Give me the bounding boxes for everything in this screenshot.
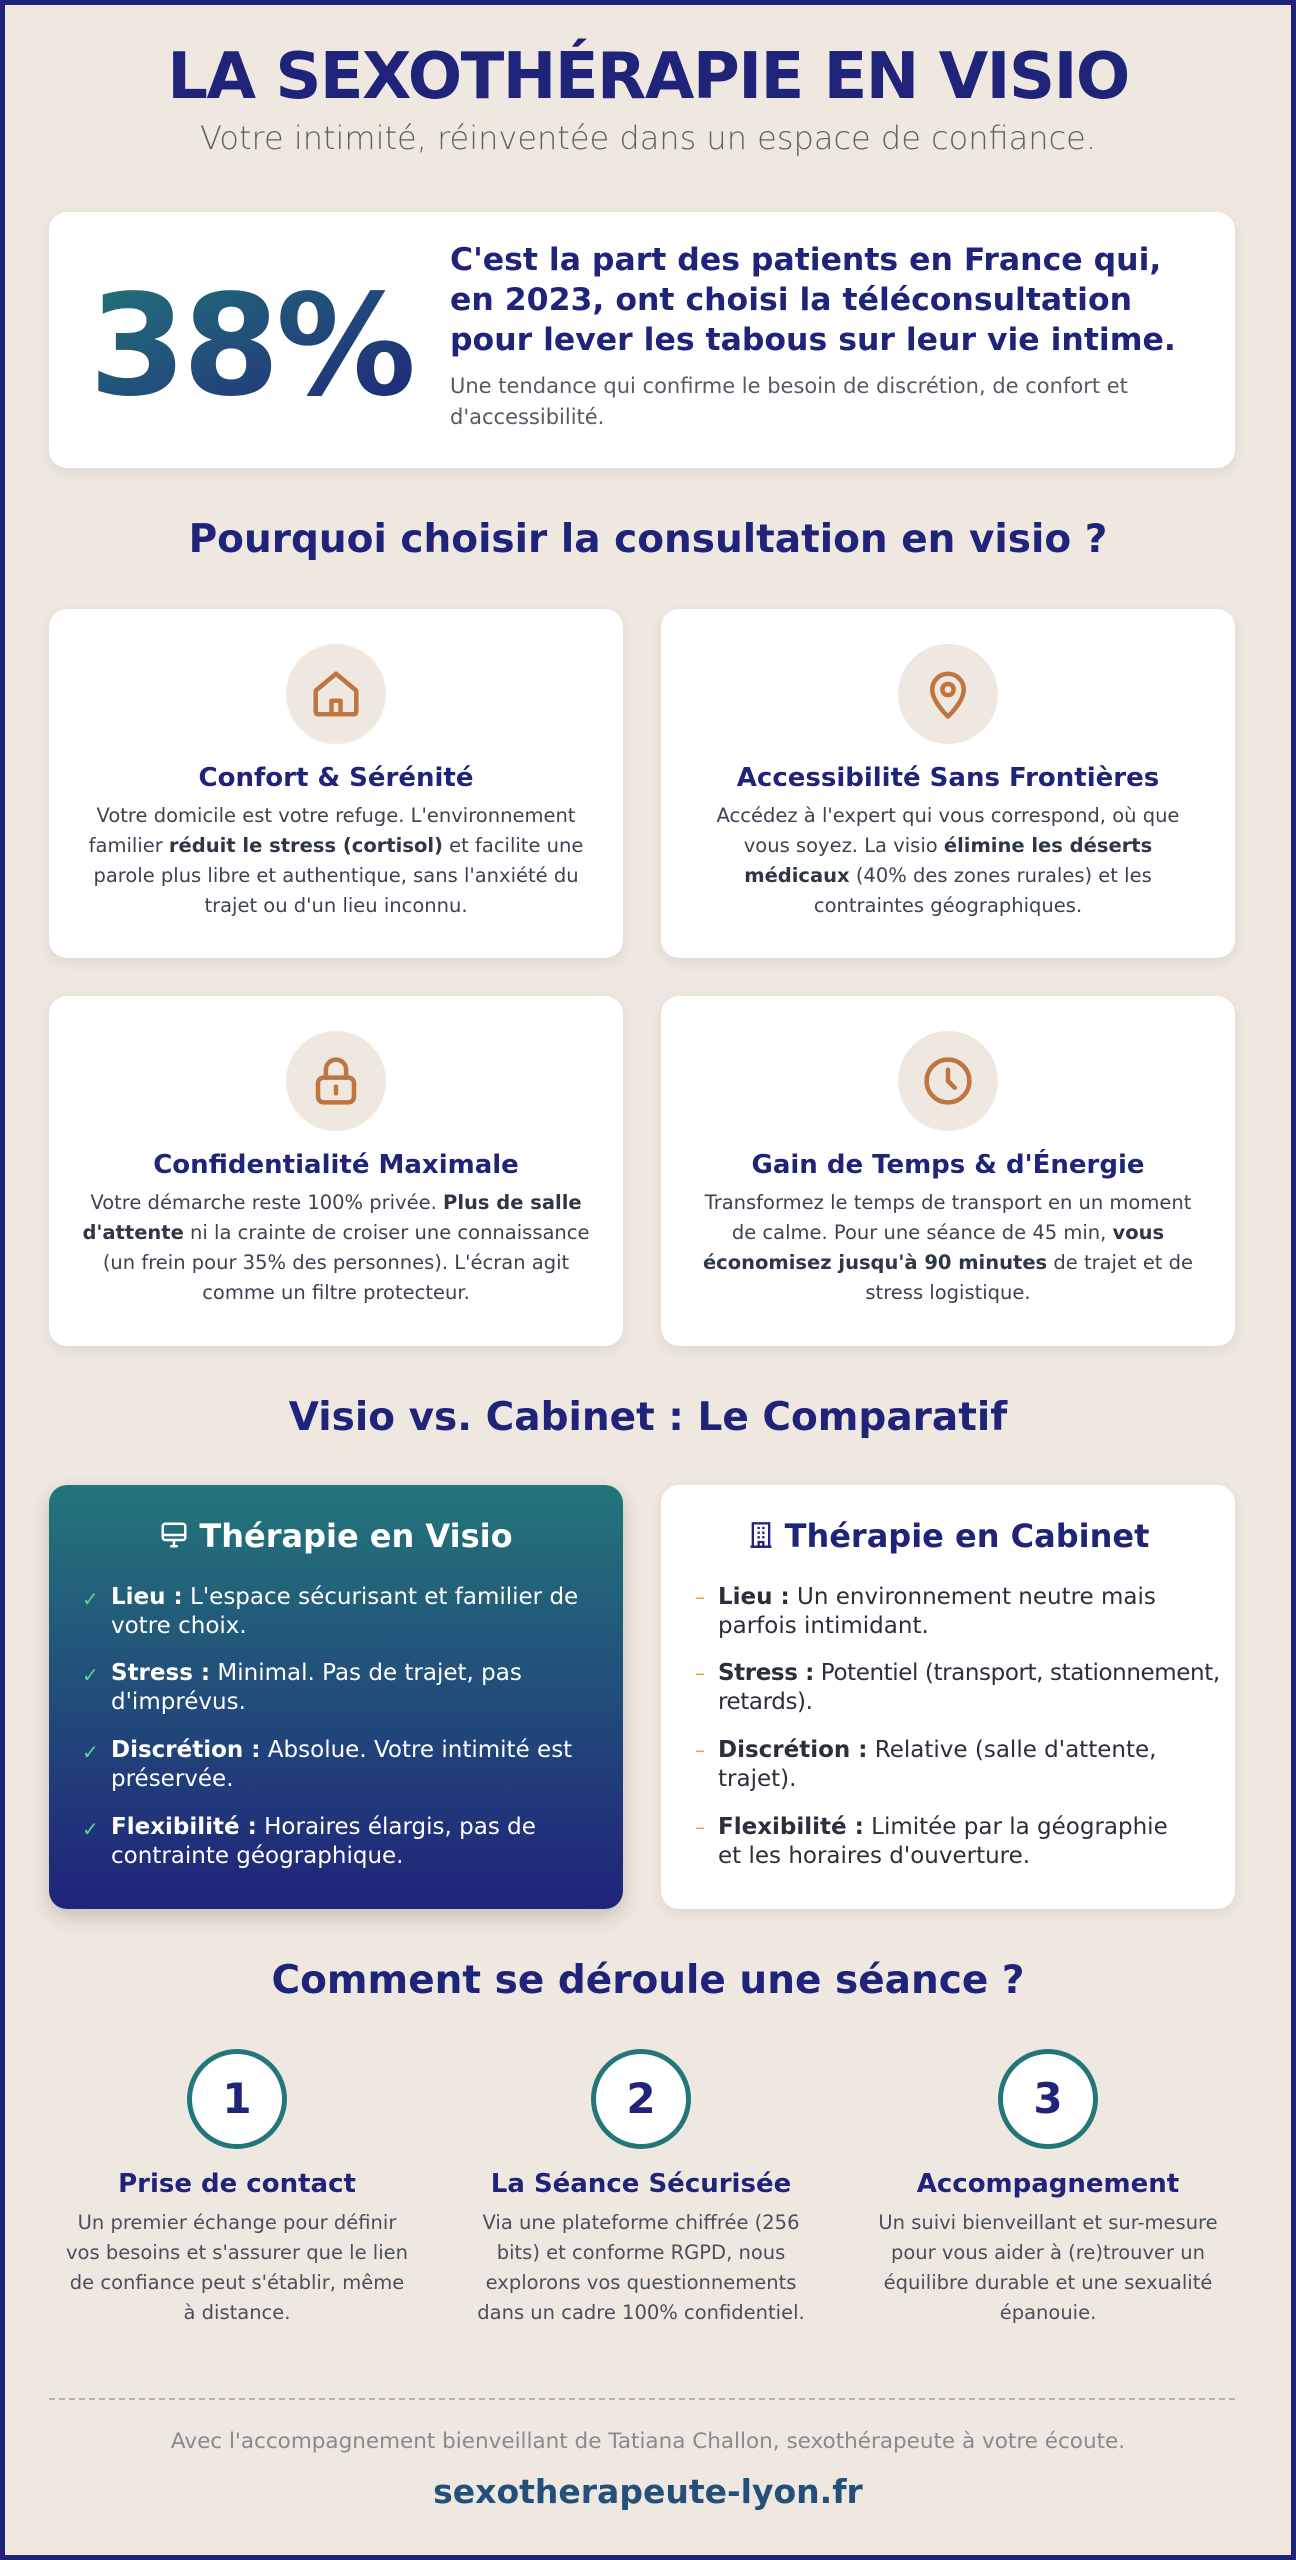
visio list: Lieu : L'espace sécurisant et familier de votre choix. bbox=[111, 1584, 578, 1639]
cabinet list bbox=[695, 1584, 1220, 1869]
cabinet title: Thérapie en Cabinet bbox=[785, 1517, 1149, 1555]
cabinet list: – bbox=[695, 1661, 705, 1685]
icon: home bbox=[286, 644, 386, 744]
card title: Accessibilité Sans Frontières bbox=[737, 763, 1159, 793]
heading: pourquoi: Pourquoi choisir la consultation en visio ? bbox=[189, 517, 1107, 562]
visio list: Stress : Minimal. Pas de trajet, pas d'imprévus. bbox=[111, 1660, 522, 1715]
step text: Un premier échange pour définir vos besoins et s'assurer que le lien de confiance peut s'établir, même à distance. bbox=[66, 2211, 408, 2324]
visio list: Flexibilité : Horaires élargis, pas de contrainte géographique. bbox=[111, 1814, 536, 1869]
card title: Gain de Temps & d'Énergie bbox=[752, 1150, 1144, 1180]
step title: Prise de contact bbox=[118, 2169, 356, 2199]
heading: comparatif: Visio vs. Cabinet : Le Comparatif bbox=[289, 1395, 1007, 1440]
circle 1 bbox=[187, 2049, 287, 2149]
visio list: Discrétion : Absolue. Votre intimité est préservée. bbox=[111, 1737, 572, 1792]
heading: deroulement: Comment se déroule une séance ? bbox=[272, 1958, 1024, 2003]
panel: visio bbox=[49, 1485, 623, 1909]
cabinet list: Lieu : Un environnement neutre mais parfois intimidant. bbox=[718, 1584, 1156, 1639]
card text: Votre démarche reste 100% privée. Plus de salle d'attente ni la crainte de croiser une connaissance (un frein pour 35% des personnes). L'écran agit comme un filtre protecteur. bbox=[82, 1191, 590, 1304]
cabinet list: Flexibilité : Limitée par la géographie et les horaires d'ouverture. bbox=[718, 1814, 1168, 1869]
panel: gain de temps bbox=[661, 996, 1235, 1346]
cabinet list: – bbox=[695, 1585, 705, 1609]
title: LA SEXOTHÉRAPIE EN VISIO bbox=[167, 40, 1129, 114]
panel: accessibilite bbox=[661, 609, 1235, 958]
cabinet list: – bbox=[695, 1738, 705, 1762]
circle 2: 2 bbox=[626, 2074, 656, 2123]
stat heading: C'est la part des patients en France qui, en 2023, ont choisi la téléconsultation pour lever les tabous sur leur vie intime. bbox=[450, 242, 1176, 358]
panel: cabinet bbox=[661, 1485, 1235, 1909]
panel: confort bbox=[49, 609, 623, 958]
step 2 bbox=[477, 2049, 805, 2324]
card text: Votre domicile est votre refuge. L'environnement familier réduit le stress (cortisol) et facilite une parole plus libre et authentique, sans l'anxiété du trajet ou d'un lieu inconnu. bbox=[89, 804, 583, 917]
subtitle: Votre intimité, réinventée dans un espace de confiance. bbox=[200, 119, 1096, 157]
card title: Confort & Sérénité bbox=[199, 763, 473, 793]
circle 3 bbox=[998, 2049, 1098, 2149]
card title: Confidentialité Maximale bbox=[153, 1150, 519, 1180]
footer text: Avec l'accompagnement bienveillant de Tatiana Challon, sexothérapeute à votre écoute. bbox=[171, 2429, 1125, 2454]
step title: Accompagnement bbox=[917, 2169, 1179, 2199]
step 3 bbox=[878, 2049, 1218, 2324]
visio list bbox=[82, 1584, 578, 1869]
step title: La Séance Sécurisée bbox=[491, 2169, 791, 2199]
icon: lock bbox=[286, 1031, 386, 1131]
step 1 bbox=[66, 2049, 408, 2324]
cabinet list: – bbox=[695, 1815, 705, 1839]
cabinet list: Stress : Potentiel (transport, stationnement, retards). bbox=[718, 1660, 1220, 1715]
panel: confidentialite bbox=[49, 996, 623, 1346]
cabinet list: Discrétion : Relative (salle d'attente, trajet). bbox=[718, 1737, 1156, 1792]
step text: Un suivi bienveillant et sur-mesure pour vous aider à (re)trouver un équilibre durable et une sexualité épanouie. bbox=[878, 2211, 1218, 2324]
card text: Transformez le temps de transport en un moment de calme. Pour une séance de 45 min, vous économisez jusqu'à 90 minutes de trajet et de stress logistique. bbox=[703, 1191, 1193, 1304]
icon: map pin bbox=[898, 644, 998, 744]
card text: Accédez à l'expert qui vous correspond, où que vous soyez. La visio élimine les déserts médicaux (40% des zones rurales) et les contraintes géographiques. bbox=[717, 804, 1179, 917]
circle 3: 3 bbox=[1033, 2074, 1063, 2123]
visio list: ✓ bbox=[82, 1663, 99, 1687]
visio title: Thérapie en Visio bbox=[199, 1517, 513, 1555]
icon: clock bbox=[898, 1031, 998, 1131]
visio list: ✓ bbox=[82, 1587, 99, 1611]
panel: stat card bbox=[49, 212, 1235, 468]
visio list: ✓ bbox=[82, 1740, 99, 1764]
footer url: sexotherapeute-lyon.fr bbox=[433, 2472, 863, 2511]
visio list: ✓ bbox=[82, 1817, 99, 1841]
circle 2 bbox=[591, 2049, 691, 2149]
step text: Via une plateforme chiffrée (256 bits) et conforme RGPD, nous explorons vos questionnements dans un cadre 100% confidentiel. bbox=[477, 2211, 805, 2324]
stat description: Une tendance qui confirme le besoin de discrétion, de confort et d'accessibilité. bbox=[450, 374, 1128, 429]
circle 1: 1 bbox=[222, 2074, 252, 2123]
